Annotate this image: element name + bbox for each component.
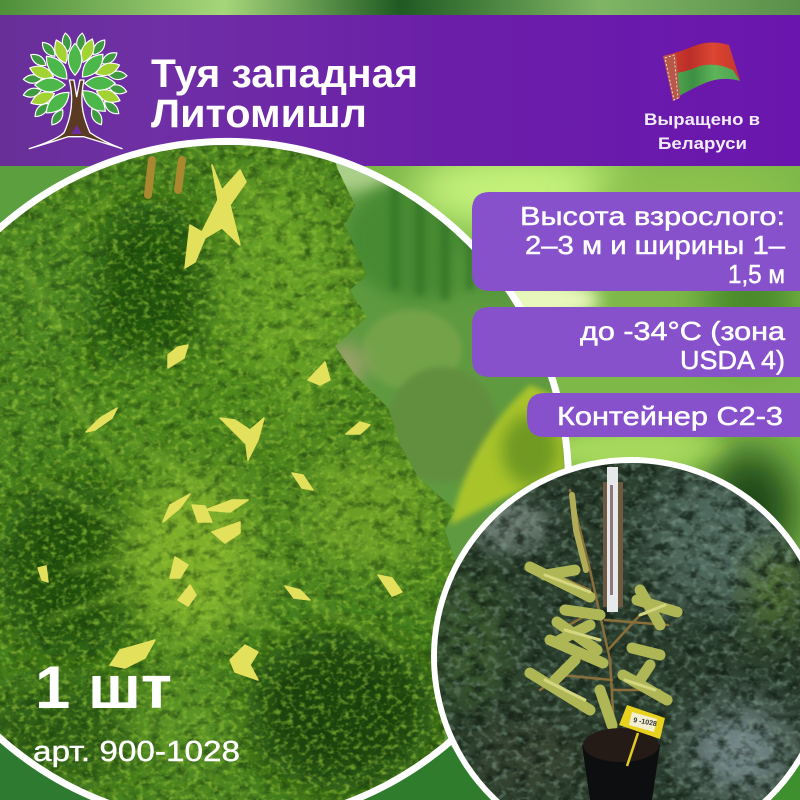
title: Литомишл — [151, 92, 367, 136]
article number: арт. 900-1028 — [33, 736, 240, 768]
photo: potted thuja with measuring ruler in circle — [430, 455, 800, 800]
yellow plant tag: 9 -1028 — [633, 717, 657, 728]
thuja sapling — [530, 490, 677, 745]
panel: frost hardiness: до -34°C (зона — [580, 316, 786, 346]
thuja foliage — [0, 145, 455, 800]
yellow plant tag — [619, 705, 665, 766]
caption: grown in Belarus: Беларуси — [658, 135, 747, 153]
icon: Belarus flag — [663, 42, 740, 101]
panel: container size — [527, 393, 800, 437]
caption: grown in Belarus: Выращено в — [644, 111, 760, 129]
logo: tree — [22, 32, 128, 149]
black pot with soil — [582, 728, 660, 800]
panel: mature height: 1,5 м — [728, 259, 785, 289]
blurred garden behind the thuja — [306, 154, 565, 526]
title — [151, 52, 418, 136]
panel: frost hardiness: USDA 4) — [680, 345, 785, 375]
panel: container size: Контейнер С2-3 — [557, 401, 783, 431]
yellow variegated tips — [38, 165, 402, 680]
foliage sprays — [20, 170, 420, 650]
tree trunk and roots — [29, 80, 122, 149]
title: Туя западная — [151, 52, 418, 96]
quantity label: 1 шт — [35, 654, 172, 721]
ruler — [603, 467, 623, 612]
panel: mature height — [472, 192, 800, 291]
header band — [0, 15, 800, 166]
panel: frost hardiness — [472, 307, 800, 377]
caption: grown in Belarus — [644, 111, 760, 153]
panel: mature height: 2–3 м и ширины 1– — [525, 230, 786, 260]
panel: mature height: Высота взрослого: — [520, 201, 785, 231]
tree leaves — [22, 32, 128, 127]
photo: large thuja close-up in circle — [0, 130, 580, 800]
